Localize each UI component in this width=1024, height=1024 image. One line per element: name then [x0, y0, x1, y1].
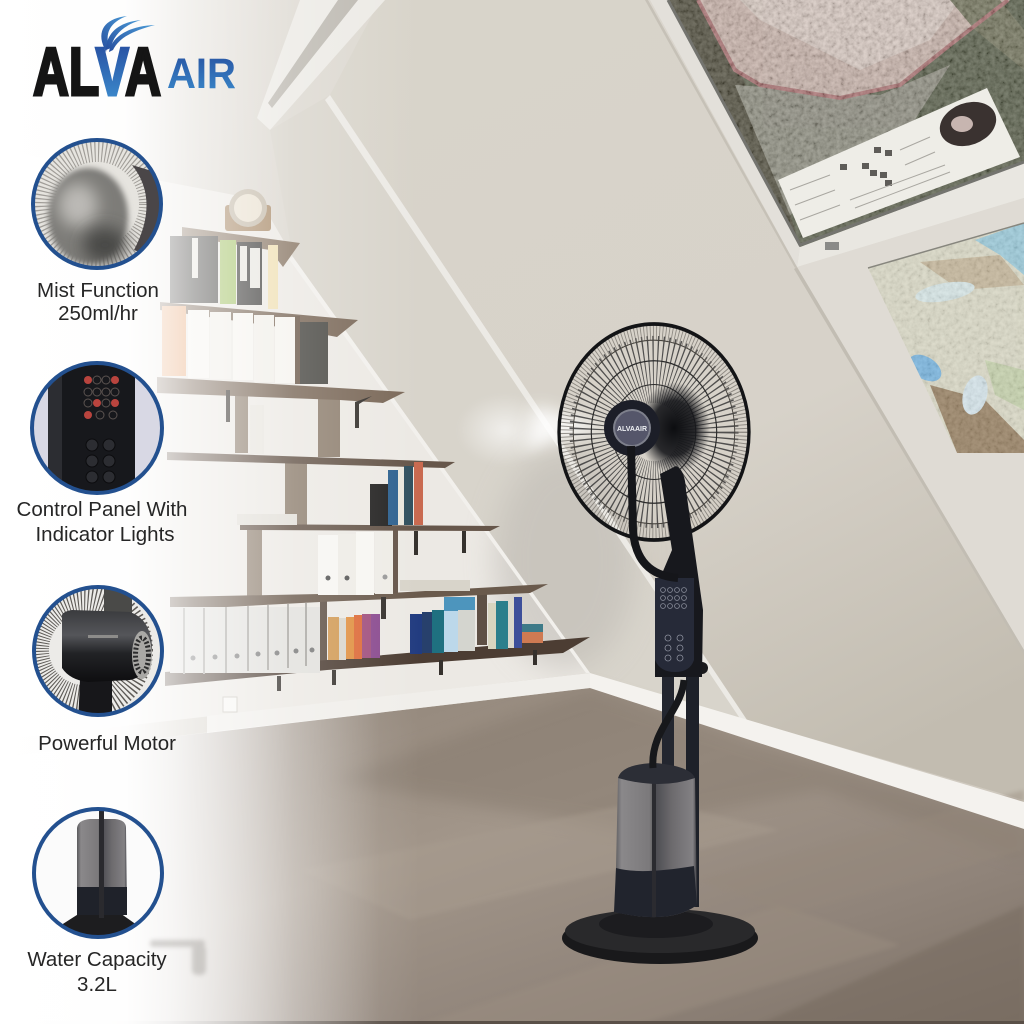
legend swatches [840, 147, 892, 186]
main wall and ceiling slope [330, 0, 1024, 800]
chair wheel shadow [150, 940, 206, 975]
shelf wall [0, 150, 590, 740]
barcode [825, 242, 839, 250]
books row 3 [237, 462, 423, 526]
top binders [170, 236, 278, 309]
hose lower [653, 680, 684, 768]
poles [662, 675, 699, 907]
shelves [157, 227, 590, 686]
supports [235, 383, 487, 670]
floor fade [0, 712, 380, 1024]
white box files [318, 532, 470, 595]
feature: control panel [17, 360, 187, 546]
label: Water Capacity [27, 948, 167, 971]
clock [225, 189, 271, 231]
baseboards [590, 673, 1024, 829]
ceiling light [257, 0, 385, 130]
books lower row [328, 597, 543, 660]
photo: control panel [34, 365, 160, 491]
motor shadow [638, 382, 710, 474]
poster edges [668, 0, 1024, 245]
feature: water capacity: 3.2L [77, 973, 117, 996]
hub: ALVAAIR [617, 426, 647, 433]
white left fade overlay [0, 0, 420, 1024]
logo [33, 16, 236, 110]
feature: powerful motor [30, 585, 176, 755]
fan [559, 324, 758, 964]
floor [0, 688, 1024, 1024]
photo: mist [35, 142, 159, 266]
label: Control Panel With [17, 498, 187, 521]
sloped wall above shelves [270, 95, 747, 720]
knob [696, 662, 708, 674]
neck [655, 466, 703, 677]
top map poster [660, 0, 1024, 267]
label: Mist Function [37, 279, 159, 302]
brackets [226, 390, 537, 691]
logo wordmark: ALVA [33, 34, 161, 110]
pedestal base [562, 909, 758, 964]
label: Powerful Motor [38, 732, 176, 755]
bottom edge strip [0, 1021, 1024, 1024]
lower row binders [170, 603, 320, 674]
logo swoosh [101, 16, 155, 52]
feature: mist function [30, 138, 165, 325]
photo: motor [36, 589, 160, 713]
right map poster [860, 220, 1024, 456]
photo: water tank [62, 811, 134, 935]
shelving unit [157, 189, 590, 712]
wall socket [223, 697, 237, 712]
legend text lines [790, 137, 950, 220]
legend circle [934, 94, 1002, 154]
feature: water capacity [27, 805, 167, 996]
mist plume [457, 394, 606, 466]
fan grille [559, 324, 749, 540]
control panel [655, 578, 694, 672]
white binders [162, 306, 328, 454]
wall beside posters [797, 198, 1024, 650]
feature: control panel: Indicator Lights [35, 523, 175, 546]
hose [631, 446, 678, 578]
water tank [614, 763, 697, 917]
logo AIR: AIR [167, 50, 236, 98]
hub [604, 400, 660, 456]
legend panel [778, 88, 1020, 238]
feature: mist function: 250ml/hr [58, 302, 138, 325]
